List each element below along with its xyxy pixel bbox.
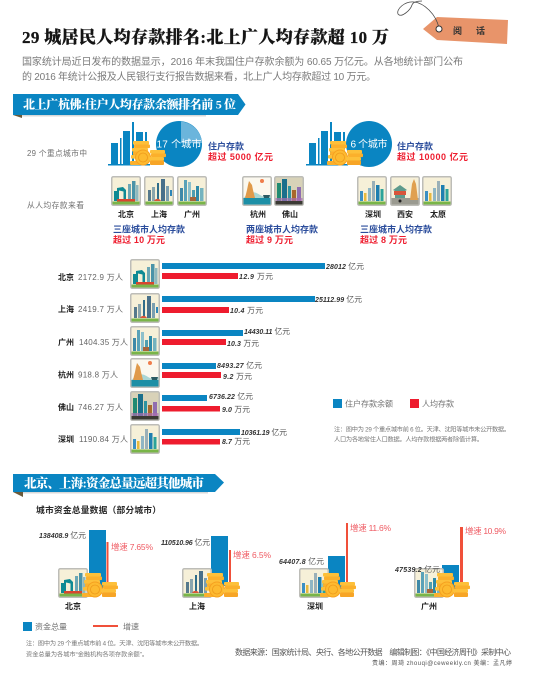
row: Beijing: [58, 260, 364, 288]
group: over 100k per capita: 三座城市人均存款: [113, 224, 185, 234]
chart: Beijing: 138408.9 亿元: [39, 530, 86, 540]
icon: 6 cities: 6 个城市: [350, 138, 388, 150]
group: over 80k per capita: 太原: [430, 209, 446, 219]
text: deposits over 1 trillion: [397, 140, 468, 162]
chart: Guangzhou: 增速 10.9%: [465, 526, 506, 536]
group: over 90k per capita: 超过 9 万元: [246, 234, 293, 245]
intro paragraph: [22, 55, 463, 83]
row: Beijing: 28012 亿元: [325, 261, 364, 271]
group: over 100k per capita: 上海: [151, 209, 167, 219]
row: Shenzhen: 1190.84 万人: [79, 435, 128, 444]
chart: Shanghai: 110510.96 亿元: [161, 537, 210, 547]
text: deposits over 500 billion: [208, 140, 273, 162]
row: Shanghai: 上海: [58, 304, 74, 314]
group: over 80k per capita: 深圳: [365, 209, 381, 219]
chart: Guangzhou: 47539.2 亿元: [394, 564, 440, 574]
chart: Guangzhou: [394, 526, 506, 611]
note 2: 注：图中为 29 个重点城市前 4 位。天津、沈阳等城市未公开数据。: [26, 640, 203, 648]
row: Hangzhou: 9.2 万元: [223, 372, 252, 381]
note 1: 人口为各地常住人口数据。人均存款根据两者除值计算。: [334, 436, 483, 444]
group: over 80k per capita: [358, 177, 451, 245]
row: Guangzhou: 10.3 万元: [227, 339, 259, 348]
chart heading: 城市资金总量数据（部分城市）: [36, 504, 161, 515]
chart: Beijing: 增速 7.65%: [111, 542, 153, 552]
legend: total funds and growth: 资金总量: [35, 622, 67, 632]
row: Hangzhou: [58, 359, 262, 387]
row: Foshan: 9.0 万元: [222, 405, 250, 414]
section banner 2: [13, 474, 224, 497]
row: Shanghai: 2419.7 万人: [78, 305, 123, 314]
row: Beijing: 12.9 万元: [239, 272, 273, 281]
group: over 90k per capita: [243, 177, 318, 245]
row: Guangzhou: 14430.11 亿元: [244, 326, 290, 336]
chart: Shanghai: [161, 536, 271, 611]
group: over 100k per capita: 北京: [118, 209, 134, 219]
group: over 100k per capita: [112, 177, 206, 245]
chart: Beijing: [39, 530, 153, 611]
chart: Beijing: 北京: [65, 601, 81, 611]
legend: total funds and growth: 增速: [123, 622, 139, 632]
row: Shenzhen: 8.7 万元: [222, 437, 250, 446]
chart: Guangzhou: 广州: [421, 601, 437, 611]
row label: 29 key cities: 29 个重点城市中: [27, 148, 87, 158]
row: Hangzhou: 8493.27 亿元: [217, 360, 262, 370]
row: Foshan: 746.27 万人: [78, 403, 123, 412]
chart: Shenzhen: [279, 523, 391, 611]
text: deposits over 1 trillion: 住户存款: [397, 140, 433, 152]
row: Guangzhou: [58, 326, 290, 355]
group: over 90k per capita: 杭州: [250, 209, 266, 219]
section banner 1: 北上广杭佛:住户人均存款余额排名前 5 位: [23, 96, 236, 112]
row: Beijing: 2172.9 万人: [78, 273, 123, 282]
section banner 2: 北京、上海:资金总量远超其他城市: [24, 476, 204, 490]
row label: per capita: 从人均存款来看: [27, 200, 84, 210]
legend: deposits and per capita: [333, 398, 454, 408]
row: Shanghai: 10.4 万元: [230, 306, 263, 315]
row: Shenzhen: 10361.19 亿元: [241, 427, 287, 437]
group: over 90k per capita: 佛山: [282, 209, 298, 219]
row: Guangzhou: 广州: [58, 337, 74, 347]
row: Guangzhou: 1404.35 万人: [79, 338, 128, 347]
row: Shenzhen: 深圳: [58, 434, 74, 444]
group: over 100k per capita: 超过 10 万元: [113, 234, 165, 245]
chart: Shenzhen: 深圳: [307, 601, 323, 611]
chart: Shenzhen: 64407.8 亿元: [279, 556, 324, 566]
group: over 80k per capita: 西安: [397, 209, 413, 219]
legend: deposits and per capita: 住户存款余额: [345, 398, 393, 408]
row: Shanghai: [58, 294, 362, 322]
title: 29 城居民人均存款排名:北上广人均存款超 10 万: [22, 27, 389, 47]
icon: 17 cities: 17 个城市: [156, 138, 202, 150]
note 2: 资金总量为各城市“金融机构各项存款余额”。: [26, 650, 148, 658]
row: Hangzhou: 918.8 万人: [78, 370, 118, 380]
icon: 17 cities: [108, 121, 202, 167]
group: over 90k per capita: 两座城市人均存款: [246, 224, 318, 234]
legend: total funds and growth: [23, 622, 139, 632]
row: Beijing: 北京: [58, 272, 74, 282]
chart: Shanghai: 上海: [189, 601, 205, 611]
chart: Shenzhen: 增速 11.6%: [350, 523, 391, 533]
row: Shanghai: 25112.99 亿元: [314, 294, 362, 304]
tag: column label with string: [398, 1, 508, 44]
note 2: [26, 640, 203, 658]
text: deposits over 500 billion: 住户存款: [208, 140, 244, 152]
bar chart: deposits and per capita by city: [58, 260, 364, 453]
note 1: 注：图中为 29 个重点城市前 6 位。天津、沈阳等城市未公开数据。: [334, 426, 510, 434]
group: over 80k per capita: 三座城市人均存款: [360, 224, 432, 234]
intro paragraph: 国家统计局近日发布的数据显示，2016 年末我国住户存款余额为 60.65 万亿元。从各地统计部门公布: [22, 55, 463, 68]
source line: 数据来源：国家统计局、央行、各地公开数据 编辑制图：《中国经济周刊》采制中心: [235, 647, 511, 657]
intro paragraph: 的 2016 年统计公报及人民银行支行报告数据来看，北上广人均存款超过 10 万元。: [22, 70, 376, 83]
tag: column label with string: 阅: [453, 25, 462, 36]
row: Foshan: 6736.22 亿元: [209, 391, 253, 401]
group: over 100k per capita: 广州: [184, 209, 200, 219]
row: Foshan: 佛山: [58, 402, 74, 412]
tag: column label with string: 话: [476, 25, 485, 36]
chart: Shanghai: 增速 6.5%: [233, 550, 271, 560]
section banner 1: [13, 94, 246, 118]
group: over 80k per capita: 超过 8 万元: [360, 234, 407, 245]
icon: 6 cities: [306, 121, 392, 167]
row: Shenzhen: [58, 425, 287, 453]
note 1: [334, 426, 510, 444]
text: deposits over 1 trillion: 超过 10000 亿元: [397, 151, 468, 162]
legend: deposits and per capita: 人均存款: [422, 398, 454, 408]
text: deposits over 500 billion: 超过 5000 亿元: [208, 151, 273, 162]
row: Foshan: [58, 391, 253, 420]
row: Hangzhou: 杭州: [58, 370, 74, 380]
credits: 责编：周琦 zhouqi@ceweekly.cn 美编：孟凡婷: [372, 659, 512, 667]
